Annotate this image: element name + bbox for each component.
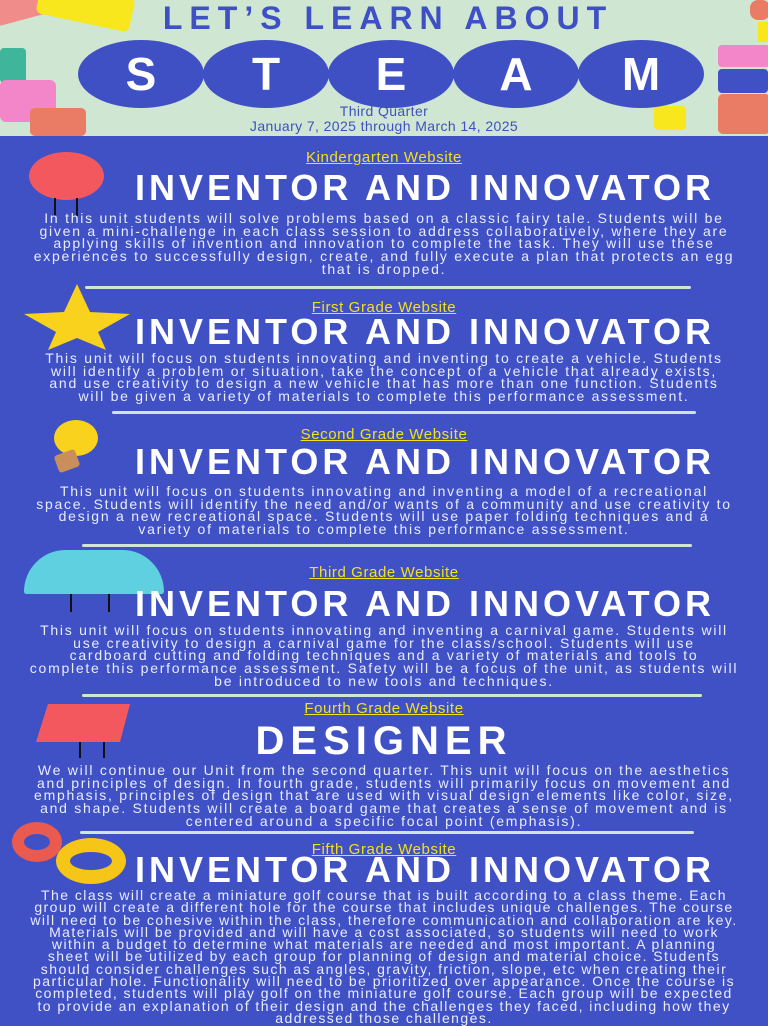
text: that is dropped. bbox=[322, 261, 446, 277]
STEAM ellipses: T bbox=[252, 48, 280, 100]
text: addressed those challenges. bbox=[275, 1010, 493, 1026]
decorative blocks left bbox=[0, 0, 134, 136]
text: will be given a variety of materials to complete this performance assessment. bbox=[79, 388, 689, 404]
text: The class will create a miniature golf course that is built according to a class theme. Each bbox=[41, 887, 727, 903]
text: In this unit students will solve problems based on a classic fairy tale. Students will be bbox=[44, 210, 724, 226]
text: This unit will focus on students innovating and inventing to create a vehicle. Students bbox=[45, 350, 723, 366]
text bbox=[45, 350, 723, 404]
icon: red trapezoid bbox=[36, 704, 130, 758]
heading: INVENTOR AND INNOVATOR bbox=[135, 167, 715, 208]
STEAM ellipses: E bbox=[376, 48, 406, 100]
icon: half circle bbox=[24, 550, 164, 612]
section: first grade link: First Grade Website bbox=[312, 299, 456, 316]
text: given a mini-challenge in each class session to address collaboratively, where they are bbox=[40, 223, 728, 239]
text bbox=[36, 483, 732, 537]
text bbox=[34, 762, 734, 829]
text: and principles of design. In fourth grade, students will primarily focus on movement and bbox=[37, 775, 731, 791]
decorative blocks right bbox=[654, 0, 768, 134]
text: design a new recreational space. Students will use paper folding techniques and a bbox=[59, 508, 709, 524]
text bbox=[30, 622, 738, 689]
STEAM ellipses bbox=[78, 40, 704, 108]
text: This unit will focus on students innovating and inventing a model of a recreational bbox=[60, 483, 708, 499]
subtitle: January 7, 2025 through March 14, 2025 bbox=[250, 118, 518, 134]
text: We will continue our Unit from the second quarter. This unit will focus on the aesthetics bbox=[38, 762, 730, 778]
section: fifth grade link: Fifth Grade Website bbox=[312, 841, 456, 858]
STEAM ellipses: S bbox=[126, 48, 156, 100]
text bbox=[34, 210, 734, 277]
text: and use creativity to design a new vehicle that has more than one function. Students bbox=[49, 375, 719, 391]
heading: INVENTOR AND INNOVATOR bbox=[135, 583, 715, 624]
text: experiences to successfully design, create, and fully execute a plan that protects an egg bbox=[34, 248, 734, 264]
text: emphasis, principles of design that are used with visual design elements like color, size, bbox=[34, 787, 734, 803]
STEAM ellipses: A bbox=[499, 48, 533, 100]
text: within a budget to determine what materials are needed and most important. A planning bbox=[52, 936, 716, 952]
icon: light bulb bbox=[54, 420, 98, 472]
text: particular hole. Functionality will need to be prioritized over appearance. Once the course is bbox=[33, 973, 735, 989]
section: second grade link: Second Grade Website bbox=[301, 426, 467, 443]
text: will need to be cohesive within the class, therefore communication and collaboration are key. bbox=[30, 912, 738, 928]
text bbox=[30, 887, 738, 1026]
heading: INVENTOR AND INNOVATOR bbox=[135, 311, 715, 352]
header banner bbox=[0, 0, 768, 136]
text: applying skills of invention and innovation to complete the task. They will use these bbox=[53, 235, 715, 251]
icon: red ball character bbox=[29, 152, 104, 216]
icon: gears bbox=[12, 822, 126, 884]
text: and shape. Students will create a board game that creates a sense of movement and is bbox=[40, 800, 728, 816]
text: This unit will focus on students innovating and inventing a carnival game. Students will bbox=[40, 622, 728, 638]
title: LET’S LEARN ABOUT bbox=[163, 0, 613, 36]
text: will identify a problem or situation, take the concept of a vehicle that already exists, bbox=[51, 363, 717, 379]
text: should consider challenges such as angles, gravity, friction, slope, etc when creating their bbox=[41, 961, 727, 977]
section: kindergarten link: Kindergarten Website bbox=[306, 149, 462, 166]
text: group will create a different hole for the course that includes unique challenges. The course bbox=[34, 899, 734, 915]
text: to provide an explanation of their design and the challenges they faced, including how they bbox=[37, 998, 731, 1014]
icon: star bbox=[24, 284, 130, 350]
text: centered around a specific focal point (emphasis). bbox=[186, 813, 582, 829]
text: use creativity to design a carnival game for the class/school. Students will use bbox=[73, 635, 695, 651]
STEAM ellipses: M bbox=[622, 48, 660, 100]
heading: INVENTOR AND INNOVATOR bbox=[135, 849, 715, 890]
text: space. Students will identify the need and/or wants of a community and use creativity to bbox=[36, 496, 732, 512]
text: Materials will be provided and will have a cost associated, so students will need to work bbox=[49, 924, 719, 940]
subtitle bbox=[250, 103, 518, 134]
text: completed, students will play golf on the miniature golf course. Each group will be expected bbox=[35, 985, 733, 1001]
subtitle: Third Quarter bbox=[340, 103, 428, 119]
text: cardboard cutting and folding techniques and a variety of materials and tools to bbox=[70, 647, 698, 663]
heading: DESIGNER bbox=[256, 719, 512, 763]
text: sheet will be utilized by each group for planning of design and material choice. Students bbox=[48, 948, 720, 964]
section: fourth grade link: Fourth Grade Website bbox=[304, 700, 464, 717]
heading: INVENTOR AND INNOVATOR bbox=[135, 441, 715, 482]
section: third grade link: Third Grade Website bbox=[309, 564, 459, 581]
text: complete this performance assessment. Safety will be a focus of the unit, as students will bbox=[30, 660, 738, 676]
text: variety of materials to complete this performance assessment. bbox=[138, 521, 630, 537]
text: be introduced to new tools and techniques. bbox=[214, 673, 554, 689]
